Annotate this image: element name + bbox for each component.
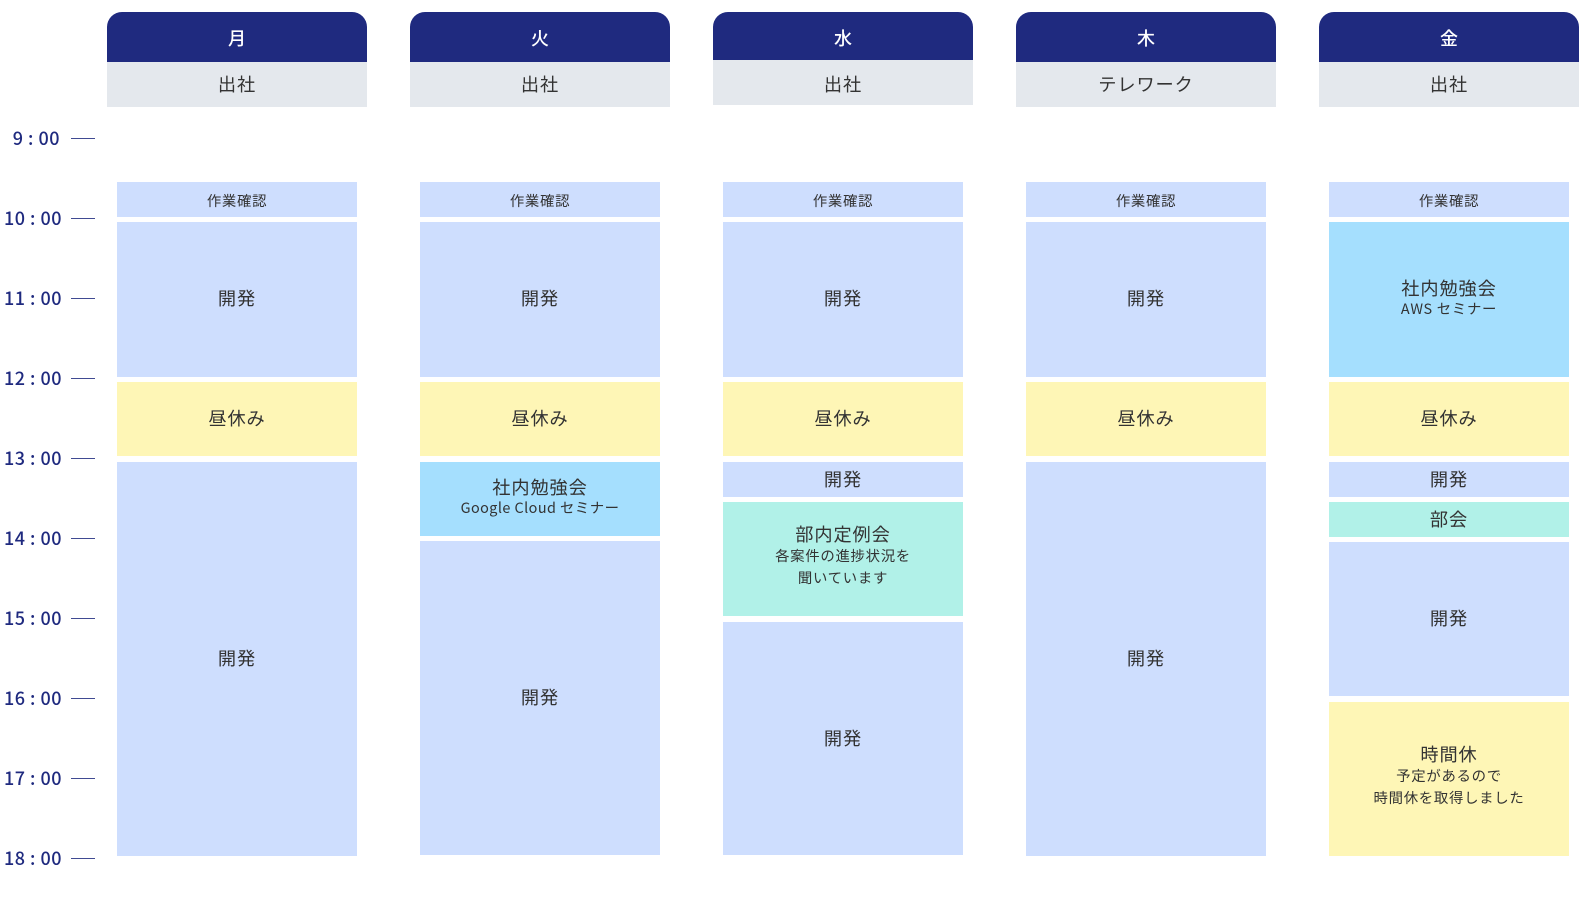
block: 開発 morning: 開発 (218, 285, 256, 311)
block: 社内勉強会 Google Cloud セミナー: Google Cloud セミナー (461, 496, 619, 518)
status: 出社 (1319, 62, 1579, 107)
time label: 11:00: 11 : 00 (4, 285, 62, 311)
heading: 水 (713, 12, 973, 60)
time label: 18:00: 18 : 00 (4, 845, 62, 871)
block: 昼休み: 昼休み (511, 405, 569, 431)
status: 出社: 出社 (824, 71, 862, 97)
block: 社内勉強会 AWS セミナー (1329, 222, 1569, 376)
block: 部会 (1329, 502, 1569, 536)
block: 作業確認: 作業確認 (207, 190, 267, 211)
block: 作業確認 (1026, 182, 1266, 216)
block: 開発 short (723, 462, 963, 496)
block: 開発 morning (420, 222, 660, 376)
panel: Thursday column (1016, 12, 1276, 856)
time label: 10:00: 10 : 00 (4, 205, 62, 231)
block: 開発 afternoon (117, 462, 357, 856)
block: 社内勉強会 AWS セミナー: 社内勉強会 (1401, 275, 1497, 301)
block: 開発 short: 開発 (824, 466, 862, 492)
status: 出社 (713, 60, 973, 105)
block: 社内勉強会 Google Cloud セミナー (420, 462, 660, 536)
block: 部内定例会: 各案件の進捗状況を (775, 545, 911, 566)
status: 出社 (410, 62, 670, 107)
block: 昼休み (420, 382, 660, 456)
block: 昼休み (117, 382, 357, 456)
block: 開発 morning: 開発 (1127, 285, 1165, 311)
block: 開発 afternoon: 開発 (1127, 645, 1165, 671)
heading: 火: 火 (531, 25, 549, 51)
block: 作業確認 (723, 182, 963, 216)
status: テレワーク: テレワーク (1098, 71, 1194, 97)
time label: 14:00: 14 : 00 (4, 525, 62, 551)
block: 昼休み: 昼休み (1117, 405, 1175, 431)
block: 作業確認 (117, 182, 357, 216)
block: 昼休み (723, 382, 963, 456)
time label: 17:00: 17 : 00 (4, 765, 62, 791)
status: 出社: 出社 (1430, 71, 1468, 97)
time label: 9:00: 9 : 00 (13, 125, 60, 151)
time label: 13:00: 13 : 00 (4, 445, 62, 471)
panel: Wednesday column (713, 12, 973, 855)
block: 社内勉強会 Google Cloud セミナー: 社内勉強会 (492, 474, 588, 500)
block: 開発 afternoon: 開発 (824, 724, 862, 750)
block: 開発 morning (723, 222, 963, 376)
block: 開発 morning: 開発 (824, 285, 862, 311)
heading: 月: 月 (228, 25, 246, 51)
block: 昼休み (1329, 382, 1569, 456)
block: 昼休み: 昼休み (1420, 405, 1478, 431)
heading: 月 (107, 12, 367, 62)
block: 開発 afternoon (1329, 542, 1569, 696)
block: 部内定例会 (723, 502, 963, 616)
block: 時間休: 時間休を取得しました (1374, 786, 1524, 808)
block: 作業確認 (1329, 182, 1569, 216)
block: 作業確認 (420, 182, 660, 216)
block: 開発 afternoon: 開発 (1430, 605, 1468, 631)
block: 開発 morning (1026, 222, 1266, 376)
block: 部内定例会: 聞いています (798, 566, 888, 588)
block: 作業確認: 作業確認 (510, 190, 570, 211)
time label: 16:00: 16 : 00 (4, 685, 62, 711)
block: 時間休: 予定があるので (1396, 765, 1502, 786)
status: テレワーク (1016, 62, 1276, 107)
time label: 15:00: 15 : 00 (4, 605, 62, 631)
block: 開発 afternoon (420, 541, 660, 855)
status: 出社 (107, 62, 367, 107)
block: 部会: 部会 (1430, 506, 1468, 532)
block: 開発 afternoon: 開発 (521, 684, 559, 710)
block: 昼休み: 昼休み (208, 405, 266, 431)
block: 開発 short (1329, 462, 1569, 496)
block: 開発 afternoon: 開発 (218, 645, 256, 671)
panel: Monday column (107, 12, 367, 856)
block: 昼休み (1026, 382, 1266, 456)
time axis (4, 125, 95, 871)
block: 開発 afternoon (723, 622, 963, 855)
heading: 火 (410, 12, 670, 62)
block: 作業確認: 作業確認 (1419, 190, 1479, 211)
time label: 12:00: 12 : 00 (4, 365, 62, 391)
heading: 水: 水 (834, 25, 852, 51)
status: 出社: 出社 (521, 71, 559, 97)
status: 出社: 出社 (218, 71, 256, 97)
block: 開発 short: 開発 (1430, 466, 1468, 492)
panel: Tuesday column (410, 12, 670, 855)
block: 開発 afternoon (1026, 462, 1266, 856)
block: 時間休: 時間休 (1420, 741, 1478, 767)
block: 時間休 (1329, 702, 1569, 856)
block: 作業確認: 作業確認 (1116, 190, 1176, 211)
block: 昼休み: 昼休み (814, 405, 872, 431)
block: 作業確認: 作業確認 (813, 190, 873, 211)
heading: 金: 金 (1440, 25, 1458, 51)
block: 開発 morning (117, 222, 357, 376)
heading: 木: 木 (1137, 25, 1155, 51)
block: 部内定例会: 部内定例会 (795, 521, 891, 547)
block: 社内勉強会 AWS セミナー: AWS セミナー (1401, 298, 1497, 319)
panel: Friday column (1319, 12, 1579, 856)
heading: 木 (1016, 12, 1276, 62)
block: 開発 morning: 開発 (521, 285, 559, 311)
heading: 金 (1319, 12, 1579, 62)
